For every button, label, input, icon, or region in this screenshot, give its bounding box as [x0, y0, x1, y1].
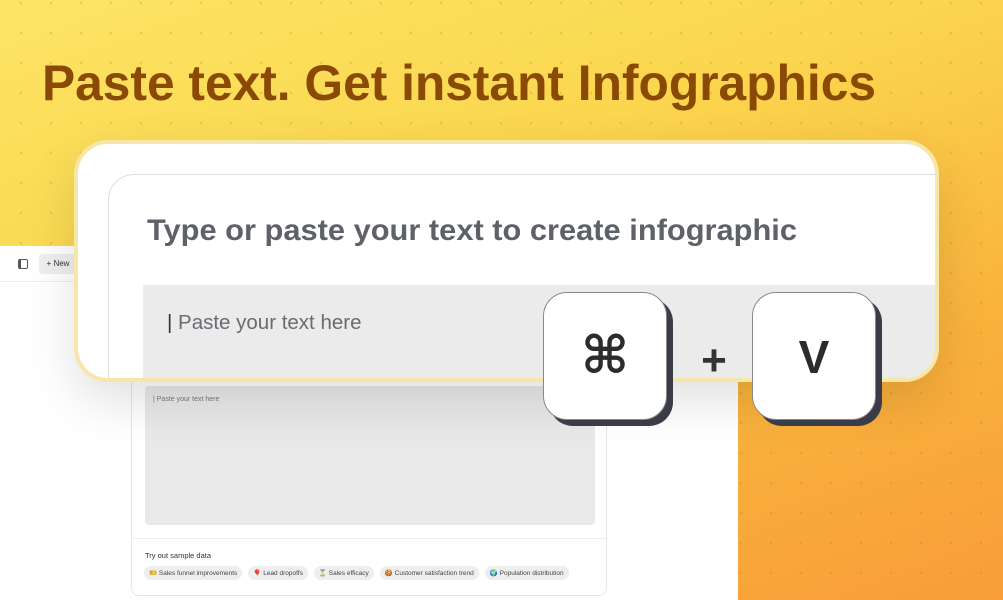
inner panel [108, 174, 1003, 434]
sample data: 🌍 Population distribution [490, 570, 564, 577]
main card [74, 140, 939, 382]
key: command [543, 292, 673, 426]
app background panel [0, 246, 738, 600]
sample data: 🍪 Customer satisfaction trend [385, 570, 474, 577]
new button [39, 254, 77, 274]
icon: sidebar [18, 259, 28, 269]
sample data [132, 538, 606, 594]
lower app panel [131, 370, 607, 596]
new button: + New [47, 259, 69, 268]
sample data: 🎈 Lead dropoffs [253, 570, 303, 577]
text input [143, 285, 943, 405]
nav bar [0, 246, 738, 282]
key: command: ⌘ [581, 326, 629, 386]
key: V [752, 292, 882, 426]
input area [145, 386, 595, 525]
text input: | Paste your text here [167, 311, 361, 334]
sample data: ⏳ Sales efficacy [319, 570, 369, 577]
sample data: Try out sample data [145, 551, 211, 560]
key: V: V [799, 331, 829, 383]
title: Paste text. Get instant Infographics [42, 55, 876, 111]
sample data: 🎫 Sales funnel improvements [149, 570, 237, 577]
plus sign: + [701, 336, 727, 385]
card heading: Type or paste your text to create infographic [147, 214, 797, 247]
input area: | Paste your text here [153, 396, 219, 403]
